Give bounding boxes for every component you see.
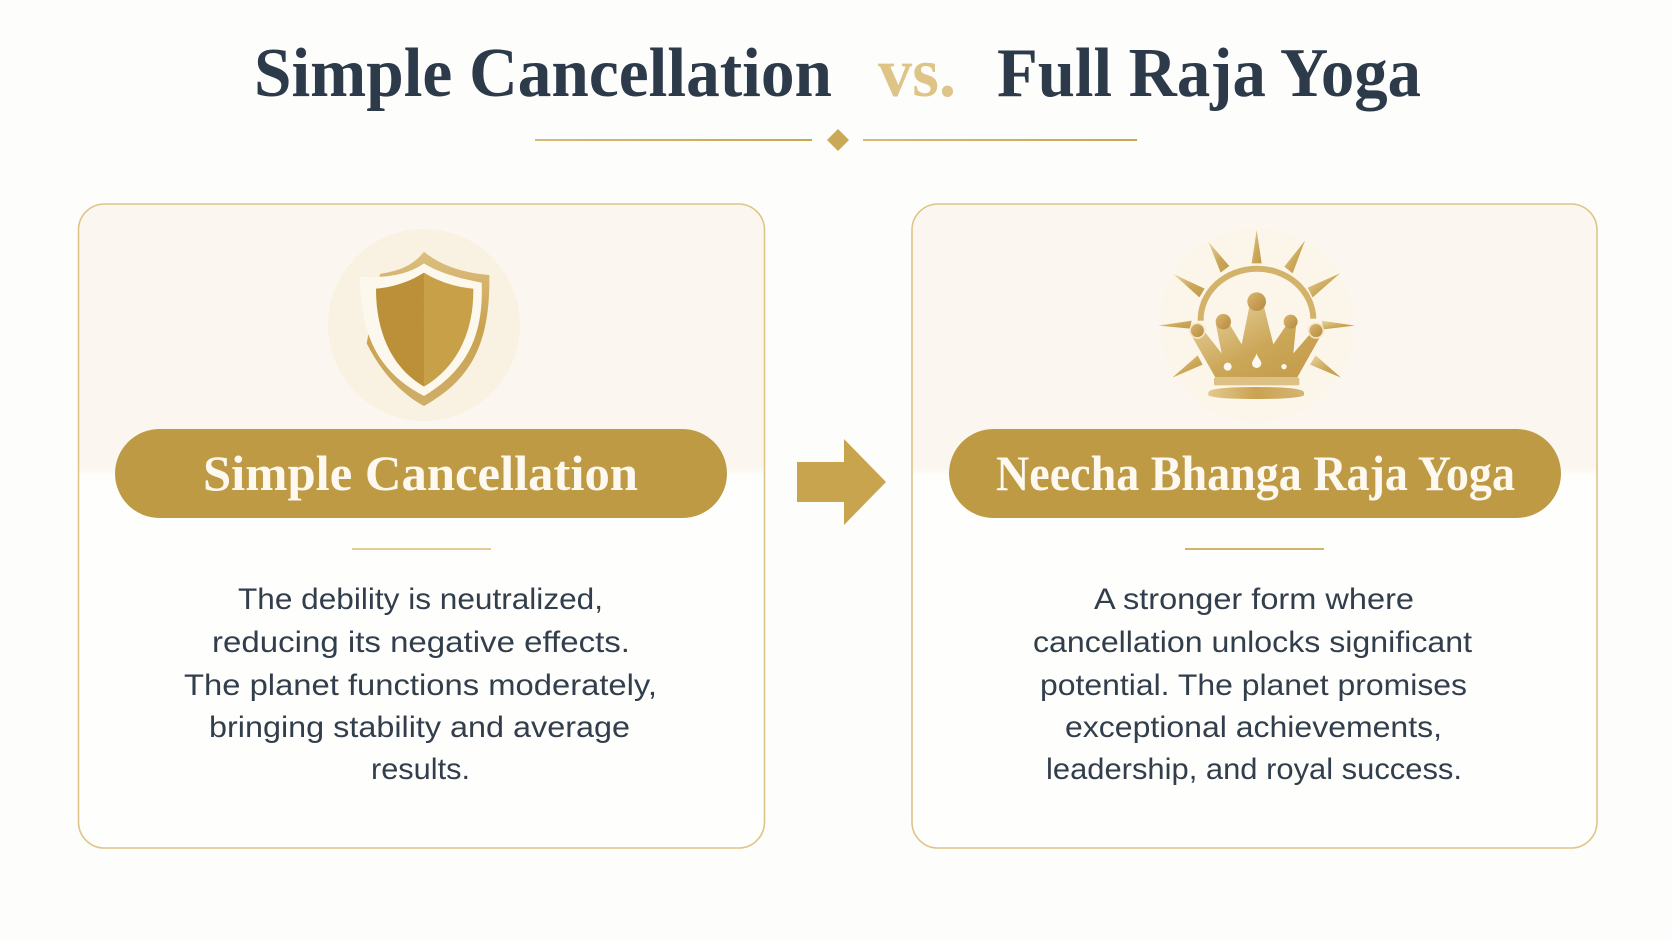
icon: crown with rays <box>1158 228 1355 422</box>
body text: cancellation unlocks significant <box>1033 626 1473 659</box>
title pill: Simple Cancellation <box>203 445 638 501</box>
icon: shield <box>328 229 520 421</box>
body text <box>184 583 657 786</box>
short divider <box>352 548 491 550</box>
title <box>254 35 1421 112</box>
title: Full Raja Yoga <box>997 35 1421 112</box>
panel: neecha bhanga raja yoga <box>912 204 1597 848</box>
body text <box>1033 583 1473 786</box>
panel background <box>78 204 764 848</box>
panel: simple cancellation <box>78 204 764 848</box>
body text: leadership, and royal success. <box>1046 753 1462 786</box>
body text: The debility is neutralized, <box>238 583 603 616</box>
body text: results. <box>371 753 470 786</box>
short divider <box>1185 548 1324 550</box>
panel background <box>912 204 1597 848</box>
title pill <box>115 429 727 518</box>
body text: The planet functions moderately, <box>184 669 657 702</box>
title: Simple Cancellation <box>254 35 832 112</box>
title divider with diamond <box>535 129 1137 151</box>
body text: bringing stability and average <box>209 711 630 744</box>
title: vs. <box>878 35 956 112</box>
title pill <box>949 429 1561 518</box>
body text: A stronger form where <box>1094 583 1414 616</box>
body text: exceptional achievements, <box>1065 711 1442 744</box>
body text: potential. The planet promises <box>1040 669 1467 702</box>
body text: reducing its negative effects. <box>212 626 630 659</box>
arrow <box>797 439 886 525</box>
title pill: Neecha Bhanga Raja Yoga <box>996 445 1515 501</box>
